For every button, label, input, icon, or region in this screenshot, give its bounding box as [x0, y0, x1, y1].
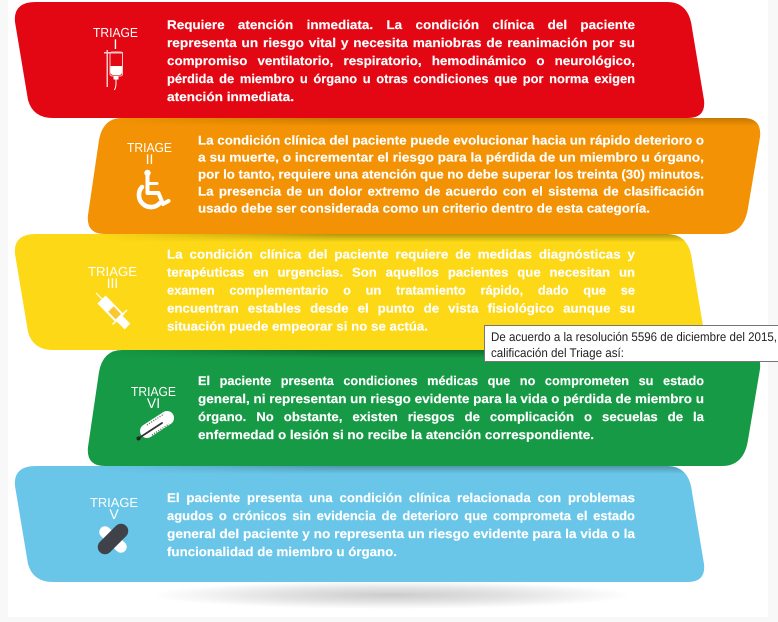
- text: Triage V description: agudos o crónicos sin evidencia de deterioro que comprometa el estado: [167, 509, 635, 523]
- floor shadow: [152, 581, 632, 609]
- text: Triage I description: compromiso ventilatorio, respiratorio, hemodinámico o neurológico,: [167, 54, 635, 68]
- text: Triage VI description: órgano. No obstante, existen riesgos de complicación o secuelas de la: [198, 410, 705, 424]
- text: Triage V description: El paciente presenta una condición clínica relacionada con problemas: [167, 491, 635, 505]
- text: Triage II description: La condición clínica del paciente puede evolucionar hacia un rápido deterioro o: [198, 134, 704, 148]
- heading: Triage V: [90, 495, 138, 522]
- text: Triage II description: a su muerte, o incrementar el riesgo para la pérdida de un miembro u órgano,: [198, 150, 704, 164]
- heading: Triage III: [88, 264, 137, 291]
- panel: Triage I: [15, 2, 704, 118]
- text: Triage VI description: general, ni representan un riesgo evidente para la vida o pérdida de miembro u: [198, 392, 704, 406]
- text: Triage V description: general del paciente y no representa un riesgo evidente para la vida o la: [167, 527, 636, 541]
- text: Triage V description: funcionalidad de miembro u órgano.: [167, 545, 397, 559]
- heading: Triage VI: TRIAGE: [131, 384, 176, 399]
- panel: Triage III: [15, 234, 760, 350]
- text: Triage III description: encuentran estables desde el punto de vista fisiológico aunque su: [167, 302, 635, 316]
- text: Triage III description: [167, 248, 635, 334]
- text: Triage I description: [167, 18, 635, 104]
- panel: Triage V: [15, 466, 760, 582]
- icon: syringe: [96, 293, 128, 326]
- panel: Triage VI: [88, 350, 760, 466]
- heading: Triage V: TRIAGE: [90, 495, 138, 510]
- text: Triage II description: por lo tanto, requiere una atención que no debe superar los treinta (30) minutos.: [198, 168, 704, 182]
- panel: Triage II: [88, 118, 760, 234]
- tooltip: calificación del Triage así:: [491, 346, 624, 360]
- icon: IV bag: [104, 50, 123, 90]
- heading: Triage III: III: [107, 275, 118, 291]
- text: Triage I description: atención inmediata.: [167, 90, 294, 104]
- text: Triage II description: [198, 134, 704, 216]
- heading: Triage I: I: [114, 36, 117, 52]
- text: Triage II description: La presencia de un dolor extremo de acuerdo con el sistema de clasificación: [198, 184, 704, 198]
- heading: Triage I: TRIAGE: [93, 25, 138, 40]
- heading: Triage I: [93, 25, 138, 52]
- text: Triage III description: examen complementario o un tratamiento rápido, dado que se: [167, 284, 635, 298]
- icon: wheelchair: [139, 170, 168, 207]
- text: Triage I description: Requiere atención inmediata. La condición clínica del paciente: [167, 18, 635, 32]
- heading: Triage II: II: [146, 151, 153, 167]
- text: Triage VI description: enfermedad o lesión si no recibe la atención correspondiente.: [198, 428, 594, 442]
- text: Triage III description: terapéuticas en urgencias. Son aquellos pacientes que necesitan un: [167, 266, 635, 280]
- icon: thermometer: [136, 414, 169, 440]
- text: Triage III description: La condición clínica del paciente requiere de medidas diagnósticas y: [167, 248, 635, 262]
- heading: Triage V: V: [109, 506, 119, 522]
- text: Triage I description: pérdida de miembro u órgano u otras condiciones que por norma exigen: [167, 72, 635, 86]
- text: Triage III description: situación puede empeorar si no se actúa.: [167, 320, 428, 334]
- heading: Triage VI: VI: [147, 395, 160, 411]
- tooltip: [484, 326, 778, 362]
- text: Triage VI description: El paciente presenta condiciones médicas que no comprometen su estado: [198, 374, 704, 388]
- text: Triage II description: usado debe ser considerada como un criterio dentro de esta categoría.: [198, 202, 650, 216]
- text: Triage V description: [167, 491, 636, 559]
- text: Triage I description: representa un riesgo vital y necesita maniobras de reanimación por su: [167, 36, 635, 50]
- heading: Triage II: [127, 140, 172, 167]
- heading: Triage II: TRIAGE: [127, 140, 172, 155]
- heading: Triage III: TRIAGE: [88, 264, 137, 279]
- heading: Triage VI: [131, 384, 176, 411]
- text: Triage VI description: [198, 374, 705, 442]
- icon: bandage: [105, 531, 121, 547]
